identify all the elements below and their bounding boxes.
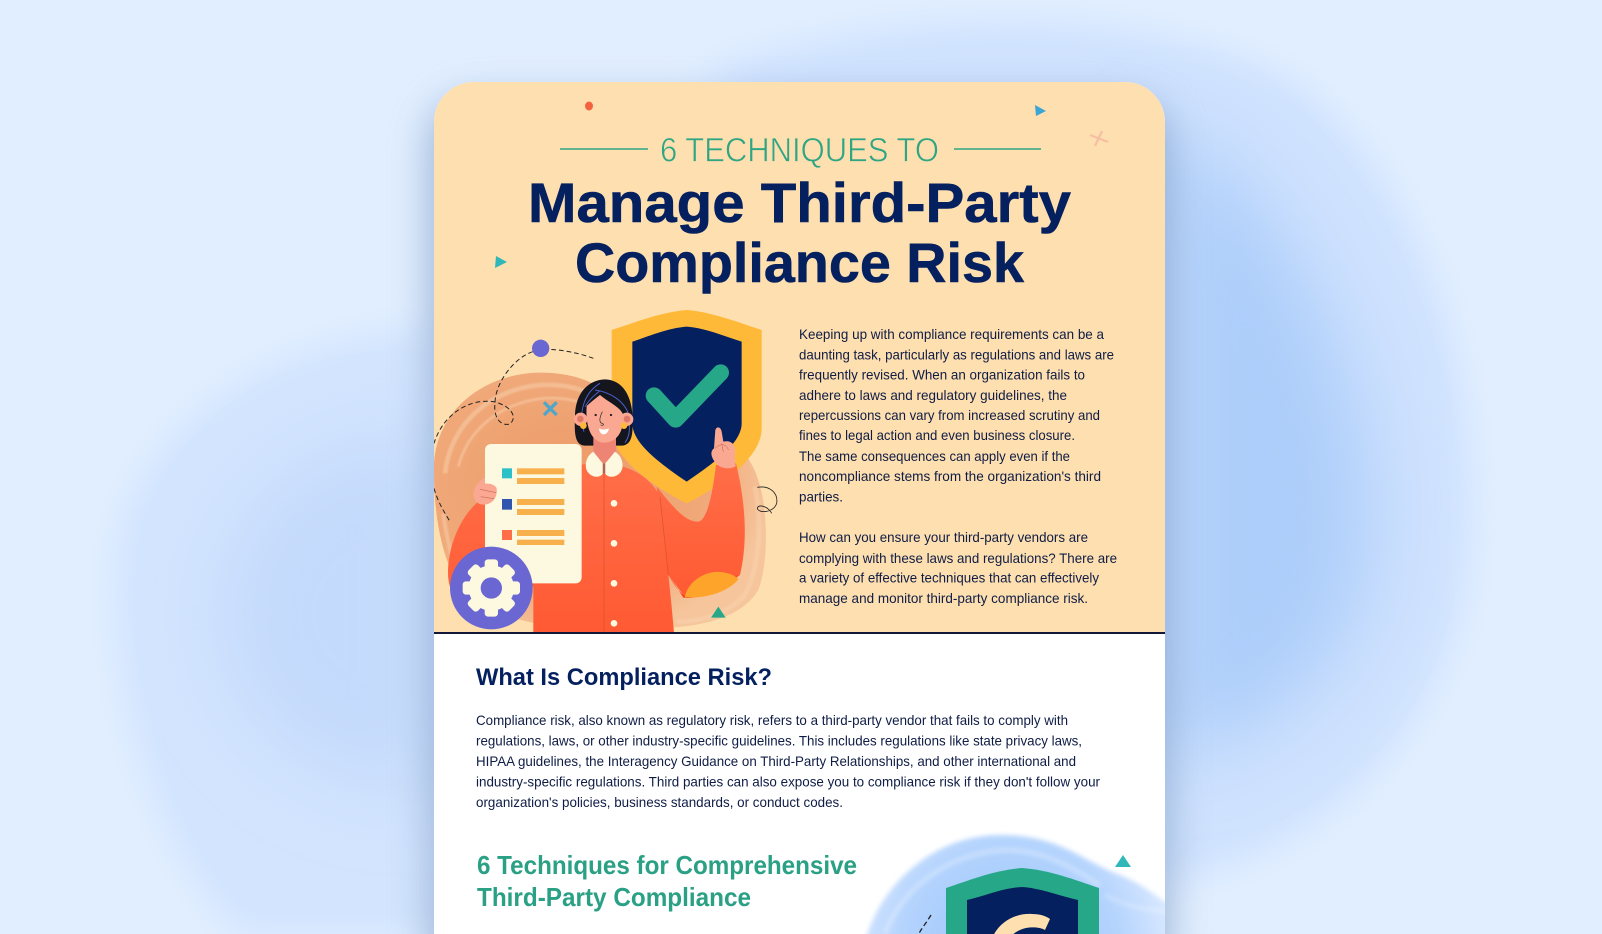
orange paint blob (434, 373, 766, 629)
definition paragraph (476, 712, 1100, 810)
heading: 6 techniques: 6 Techniques for Comprehensive (477, 850, 857, 880)
panel: infographic card (434, 82, 1175, 934)
intro text: Keeping up with compliance requirements can be a (799, 326, 1104, 342)
title: Manage Third-Party (528, 171, 1071, 234)
hair (575, 379, 633, 446)
intro text (799, 326, 1117, 606)
intro text: How can you ensure your third-party vendors are (799, 529, 1088, 545)
intro text: adhere to laws and regulatory guidelines, the (799, 387, 1067, 403)
subtitle: 6 TECHNIQUES TO (660, 132, 939, 170)
raised hand (711, 427, 736, 468)
icon: red dot (585, 102, 593, 110)
panel: peach header (434, 82, 1165, 633)
icon: pink cross (1090, 131, 1108, 146)
definition paragraph: regulations, laws, or other industry-specific guidelines. This includes regulations like state privacy laws, (476, 732, 1082, 748)
orange lump (685, 572, 738, 598)
intro text: The same consequences can apply even if the (799, 448, 1070, 464)
torso (448, 463, 674, 633)
collar (586, 452, 623, 477)
icon: green triangle (711, 607, 726, 618)
icon: gear badge (450, 547, 533, 629)
icon: teal triangle (495, 256, 507, 268)
definition paragraph: organization's policies, business standards, or conduct codes. (476, 794, 843, 810)
card shadow (430, 100, 1169, 934)
icon: shield (612, 310, 762, 503)
heading: 6 techniques: Third-Party Compliance (477, 882, 751, 912)
heading: 6 techniques (477, 850, 857, 912)
squiggle (757, 487, 777, 513)
intro text: manage and monitor third-party compliance risk. (799, 590, 1088, 606)
blue paint blob (863, 835, 1175, 934)
title (528, 171, 1071, 294)
icon: blue cross (544, 402, 557, 415)
figure (448, 379, 745, 633)
illustration: woman with shield and checklist (434, 310, 777, 633)
heading: what is compliance risk: What Is Compliance Risk? (476, 664, 772, 691)
definition paragraph: Compliance risk, also known as regulatory risk, refers to a third-party vendor that fails to comply with (476, 712, 1068, 728)
definition paragraph: industry-specific regulations. Third parties can also expose you to compliance risk if they don't follow your (476, 774, 1100, 790)
intro text: noncompliance stems from the organization's third (799, 468, 1101, 484)
icon: purple dot (532, 340, 549, 357)
buttons (611, 500, 617, 507)
intro text: frequently revised. When an organization fails to (799, 366, 1085, 382)
title: Compliance Risk (575, 231, 1025, 294)
icon: shield with cream mark (946, 868, 1099, 934)
intro text: repercussions can vary from increased scrutiny and (799, 407, 1100, 423)
icon: teal triangle (1115, 855, 1131, 867)
dashed path (434, 349, 593, 523)
illustration: lower badge (863, 835, 1175, 934)
intro text: a variety of effective techniques that can effectively (799, 570, 1099, 586)
intro text: fines to legal action and even business closure. (799, 427, 1075, 443)
definition paragraph: HIPAA guidelines, the Interagency Guidance on Third-Party Relationships, and other international and (476, 753, 1076, 769)
left hand (474, 478, 485, 505)
divider line (434, 632, 1165, 634)
icon: blue triangle (1035, 105, 1046, 116)
intro text: complying with these laws and regulations? There are (799, 550, 1117, 566)
checklist paper (485, 444, 582, 583)
dashed path (918, 915, 931, 934)
intro text: parties. (799, 488, 843, 504)
intro text: daunting task, particularly as regulations and laws are (799, 346, 1114, 362)
right arm (657, 463, 745, 597)
neck (593, 435, 616, 463)
fingers (484, 484, 497, 505)
face (586, 395, 623, 443)
